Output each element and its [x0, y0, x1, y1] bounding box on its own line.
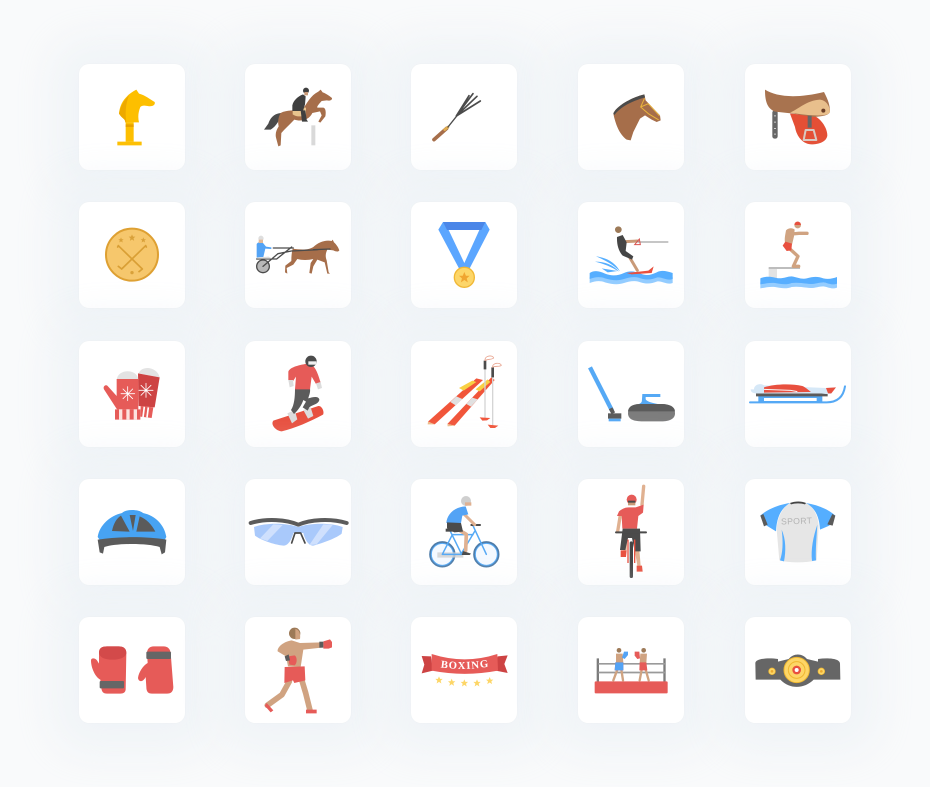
card: diving	[745, 202, 851, 308]
card: mittens	[79, 341, 185, 447]
icon: pair of boxing gloves	[91, 646, 174, 694]
card: water skiing	[578, 202, 684, 308]
icon: diver on board	[760, 222, 837, 288]
icon: boxing ribbon with stars	[422, 654, 508, 686]
icon: water skier	[590, 226, 673, 284]
card: boxer	[245, 617, 351, 723]
card: sport glasses	[245, 479, 351, 585]
icon: sport jersey: SPORT	[781, 515, 813, 527]
card: horse head	[578, 64, 684, 170]
card: boxing ring	[578, 617, 684, 723]
icon: luge sled and rider	[749, 384, 846, 404]
card: boxing gloves	[79, 617, 185, 723]
icon: skis and poles	[428, 356, 502, 428]
icon: cyclist on bike	[429, 496, 500, 568]
icon: medal with blue ribbon	[438, 222, 490, 288]
icon: harness racer and horse	[256, 236, 340, 274]
card: bike helmet	[79, 479, 185, 585]
card: harness racing	[245, 202, 351, 308]
card: medal	[411, 202, 517, 308]
card: saddle	[745, 64, 851, 170]
icon: boxer punching	[264, 628, 332, 714]
icon: snowboarder	[272, 356, 324, 432]
icon: horse head	[613, 94, 661, 140]
icon: sports sunglasses	[248, 518, 349, 546]
icon: winter mittens	[104, 368, 160, 420]
icon: cycling helmet	[98, 510, 166, 554]
icon: sport jersey	[760, 502, 836, 562]
icon: curling broom and stone	[588, 366, 675, 422]
icon: polo badge with crossed mallets	[105, 228, 159, 282]
card: snowboarder	[245, 341, 351, 447]
card: chess knight trophy	[79, 64, 185, 170]
icon: riding whip	[432, 92, 482, 142]
card: luge	[745, 341, 851, 447]
icon: racer raising arm	[615, 484, 647, 578]
card: cycling jersey	[745, 479, 851, 585]
card: curling	[578, 341, 684, 447]
card: polo badge	[79, 202, 185, 308]
icon: saddle	[765, 90, 830, 144]
card: cyclist	[411, 479, 517, 585]
icon: chess knight	[117, 90, 155, 146]
icon: boxing ribbon with stars: BOXING	[440, 660, 488, 669]
icon: show jumping horse	[264, 88, 332, 146]
card: boxing banner	[411, 617, 517, 723]
card: cycling winner	[578, 479, 684, 585]
card: champion belt	[745, 617, 851, 723]
icon: championship belt	[755, 654, 840, 687]
card: riding whip	[411, 64, 517, 170]
card: show jumping	[245, 64, 351, 170]
card: skis and poles	[411, 341, 517, 447]
icon: boxing ring with two boxers	[594, 648, 668, 694]
